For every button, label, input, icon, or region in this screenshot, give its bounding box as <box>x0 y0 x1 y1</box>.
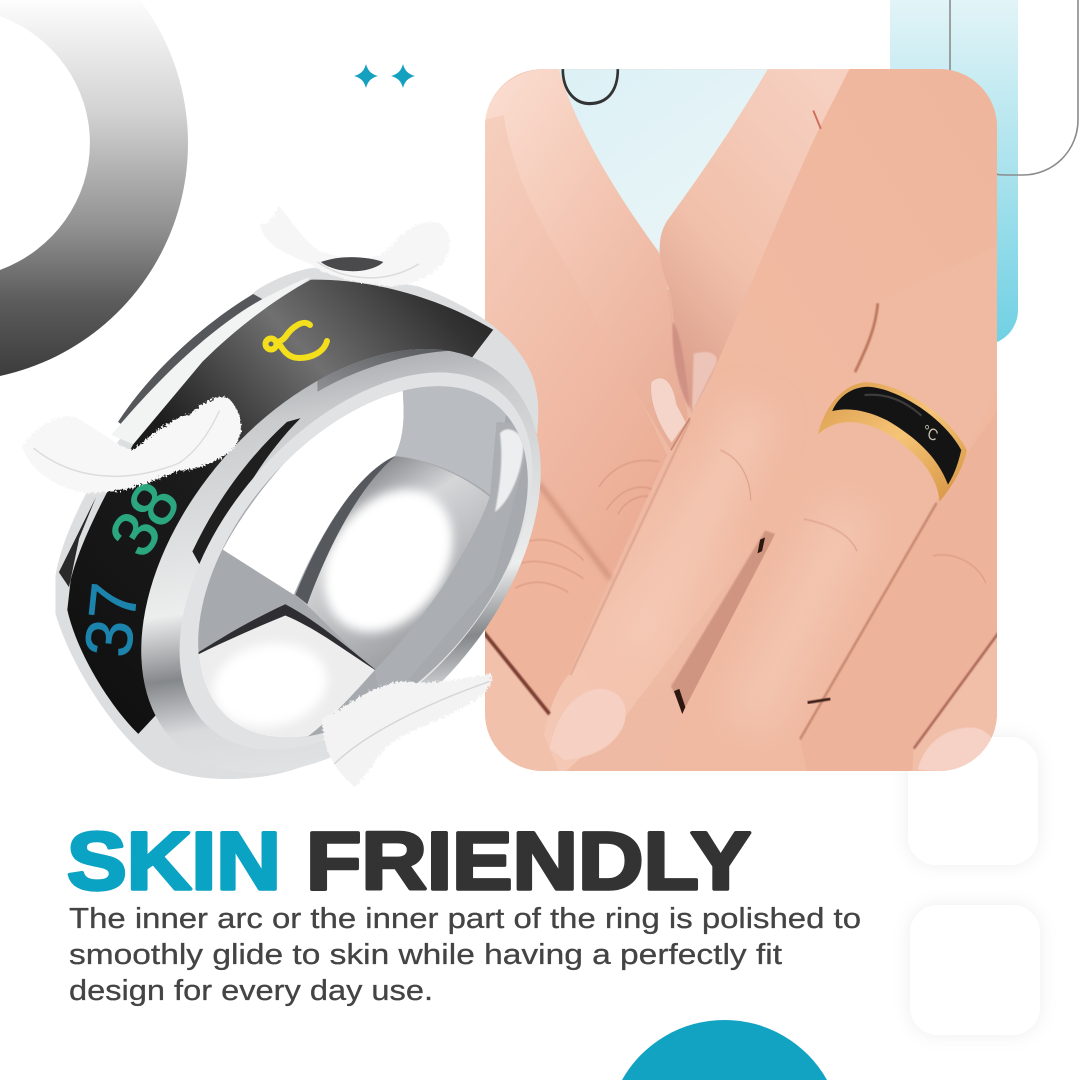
back finger <box>660 69 851 413</box>
feather top <box>260 206 450 286</box>
dark gap top <box>757 537 765 553</box>
edges <box>570 420 690 675</box>
feather bottom <box>322 674 492 787</box>
title <box>67 816 751 907</box>
left middle finger <box>481 106 667 579</box>
icon: sparkles <box>354 64 415 88</box>
lower reflection <box>198 616 375 738</box>
grey reflection <box>395 386 506 494</box>
bottom right fingernail <box>918 728 992 771</box>
right inner band <box>375 422 526 672</box>
mirror centre <box>296 456 490 648</box>
body text <box>69 903 861 1007</box>
lower left finger <box>481 418 610 714</box>
bottom right finger <box>912 646 997 771</box>
index finger <box>485 69 688 450</box>
highlight on front finger <box>638 410 767 634</box>
index fingernail <box>651 378 686 443</box>
inner lower stripe <box>307 734 316 736</box>
body text: design for every day use. <box>69 975 433 1007</box>
soft white card upper <box>908 737 1038 865</box>
dark gap bottom <box>674 689 686 714</box>
highlight on ring finger <box>740 516 860 716</box>
title: FRIENDLY <box>306 816 751 907</box>
panel: silver temperature ring <box>56 268 541 779</box>
ring temperature symbol <box>266 323 327 358</box>
main hand with front finger <box>544 69 1001 776</box>
dark reflection line <box>198 604 376 670</box>
ring band silhouette and face <box>55 268 538 779</box>
front fingernail <box>550 689 626 760</box>
right finger <box>801 428 986 771</box>
front rim bevel <box>62 273 620 849</box>
upper hand crease <box>855 303 878 372</box>
wedge between fingers <box>670 530 775 707</box>
background loop line <box>563 69 618 104</box>
body text: The inner arc or the inner part of the ring is polished to <box>69 903 861 935</box>
outer bevel white stripe <box>111 277 311 444</box>
bottom left finger <box>485 715 540 771</box>
ring inner hole <box>198 386 528 738</box>
dark stripes on bevel <box>192 349 448 564</box>
inner finger fold <box>673 322 690 409</box>
photo background <box>534 69 849 290</box>
soft white card lower <box>910 905 1040 1035</box>
black display face <box>67 280 493 734</box>
skin creases <box>508 450 986 592</box>
decorative grey gradient ring <box>0 0 188 376</box>
teal semicircle <box>622 1020 827 1080</box>
teal panel behind photo <box>890 0 1018 345</box>
outer bevel dark sliver <box>118 294 263 429</box>
white reflection <box>222 391 404 595</box>
title: SKIN <box>67 816 281 907</box>
soft shadow lines left <box>538 253 679 579</box>
gold ring on finger: °C <box>920 421 940 446</box>
gold ring on finger <box>818 382 967 502</box>
outline shape top right <box>950 0 1078 175</box>
rim inner band <box>111 307 601 815</box>
left dark edge <box>59 497 96 587</box>
ring digits 38: 38 <box>95 470 194 568</box>
ring finger <box>682 534 785 714</box>
body text: smoothly glide to skin while having a perfectly fit <box>69 939 782 971</box>
feather left <box>22 397 241 493</box>
panel: hands photo <box>481 69 1001 776</box>
ring digits 37: 37 <box>70 580 152 660</box>
